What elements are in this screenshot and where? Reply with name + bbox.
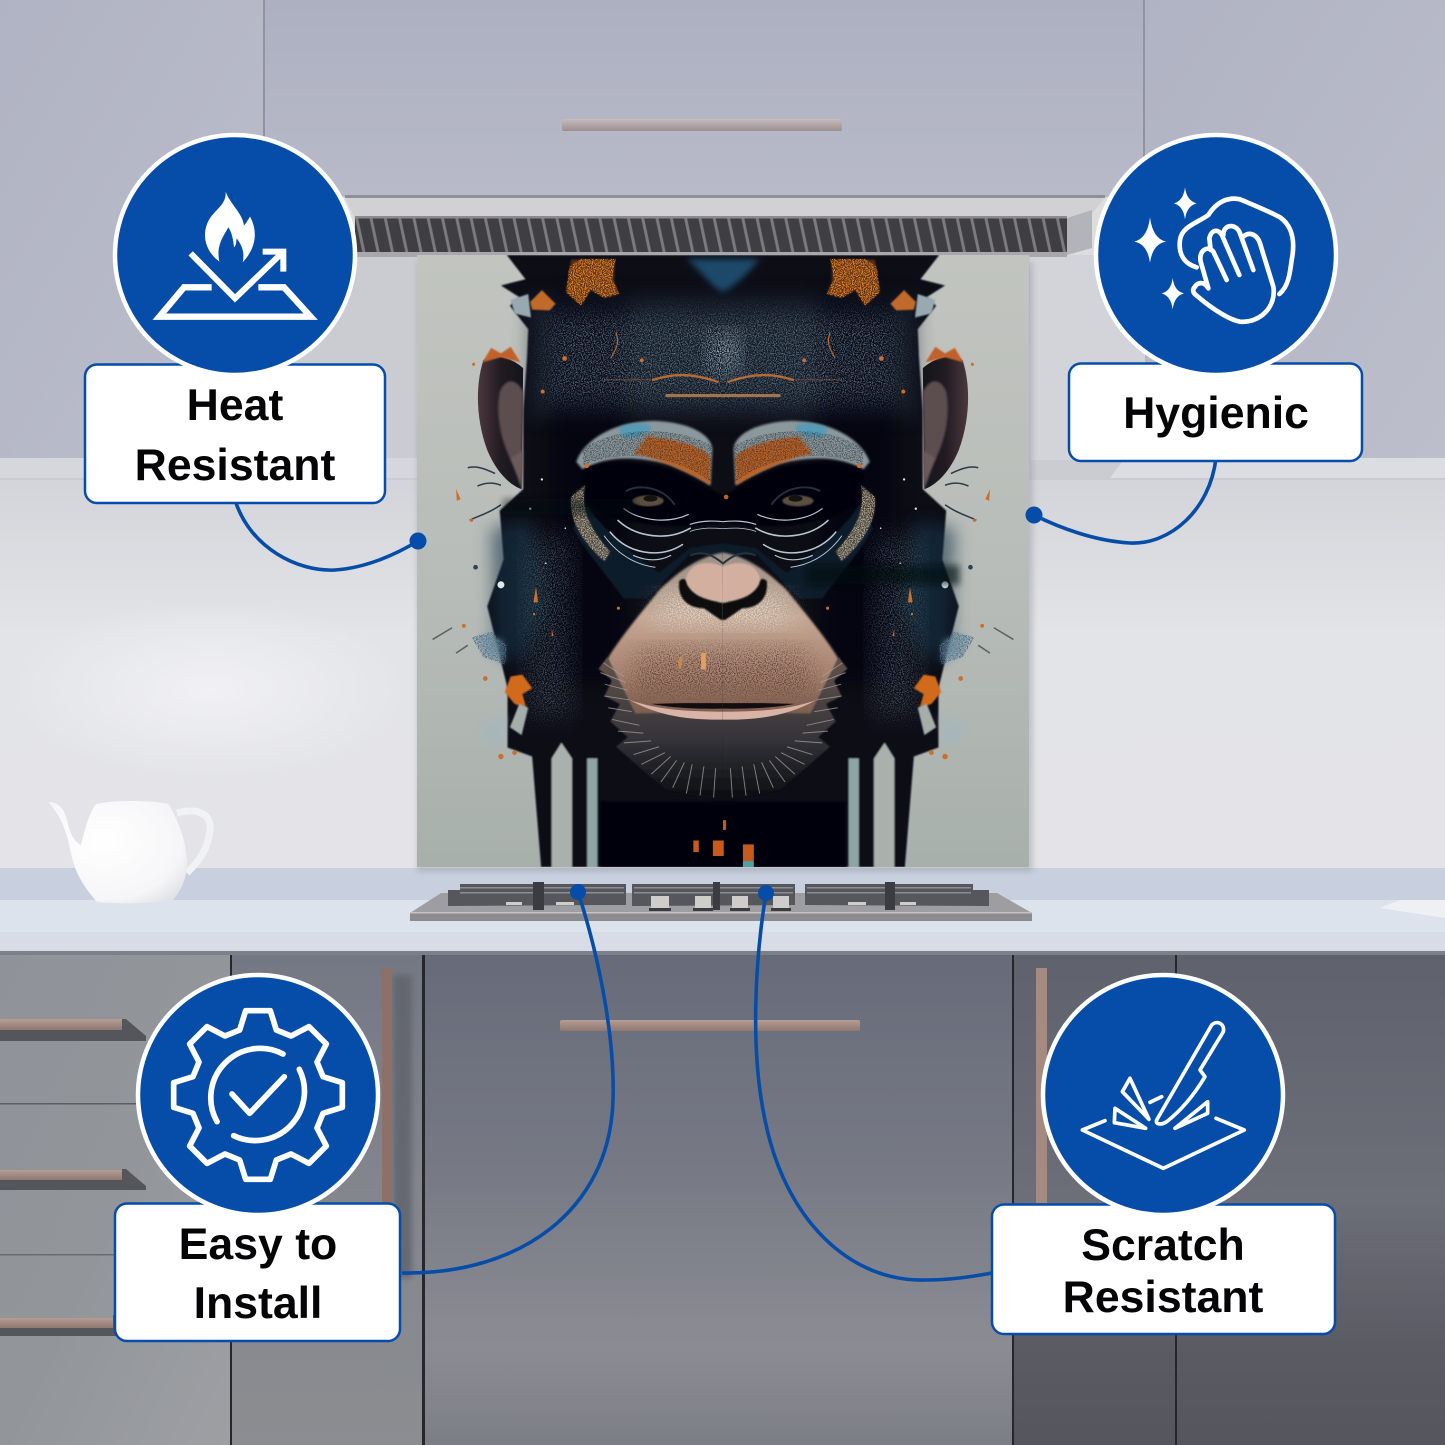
label box: Scratch Resistant (992, 1204, 1335, 1334)
connector: scratch resistant (756, 885, 992, 1280)
connector: easy to install (402, 884, 613, 1273)
label box: Easy to Install: Install (194, 1279, 322, 1328)
countertop (0, 868, 1445, 953)
lower cabinets (0, 951, 1445, 1445)
connector: heat resistant (235, 500, 426, 570)
icon badge: easy to install gear (138, 975, 378, 1215)
artwork panel: ape (417, 255, 1033, 872)
background: kitchen wall (0, 478, 1445, 870)
label box: Heat Resistant: Resistant (135, 441, 336, 490)
background: upper wall section (0, 255, 1445, 780)
label box: Heat Resistant (85, 364, 385, 503)
label box: Hygienic: Hygienic (1123, 389, 1309, 438)
connector: hygienic (1026, 458, 1216, 543)
label box: Heat Resistant: Heat (187, 381, 283, 430)
cabinet handle: upper (562, 119, 842, 131)
extractor hood (345, 195, 1105, 257)
cabinet handles: lower (0, 968, 1047, 1336)
label box: Easy to Install (115, 1204, 400, 1341)
icon badge: hygienic wiping hand (1096, 135, 1336, 375)
icon badge: scratch resistant knife (1043, 975, 1283, 1215)
label box: Hygienic (1069, 364, 1362, 461)
cooktop hob (410, 882, 1032, 921)
teapot (48, 801, 210, 903)
label box: Easy to Install: Easy to (179, 1220, 337, 1269)
label box: Scratch Resistant: Resistant (1063, 1273, 1264, 1322)
upper cabinets (0, 0, 1445, 478)
icon badge: heat resistant flame (115, 135, 355, 375)
label box: Scratch Resistant: Scratch (1081, 1221, 1245, 1270)
